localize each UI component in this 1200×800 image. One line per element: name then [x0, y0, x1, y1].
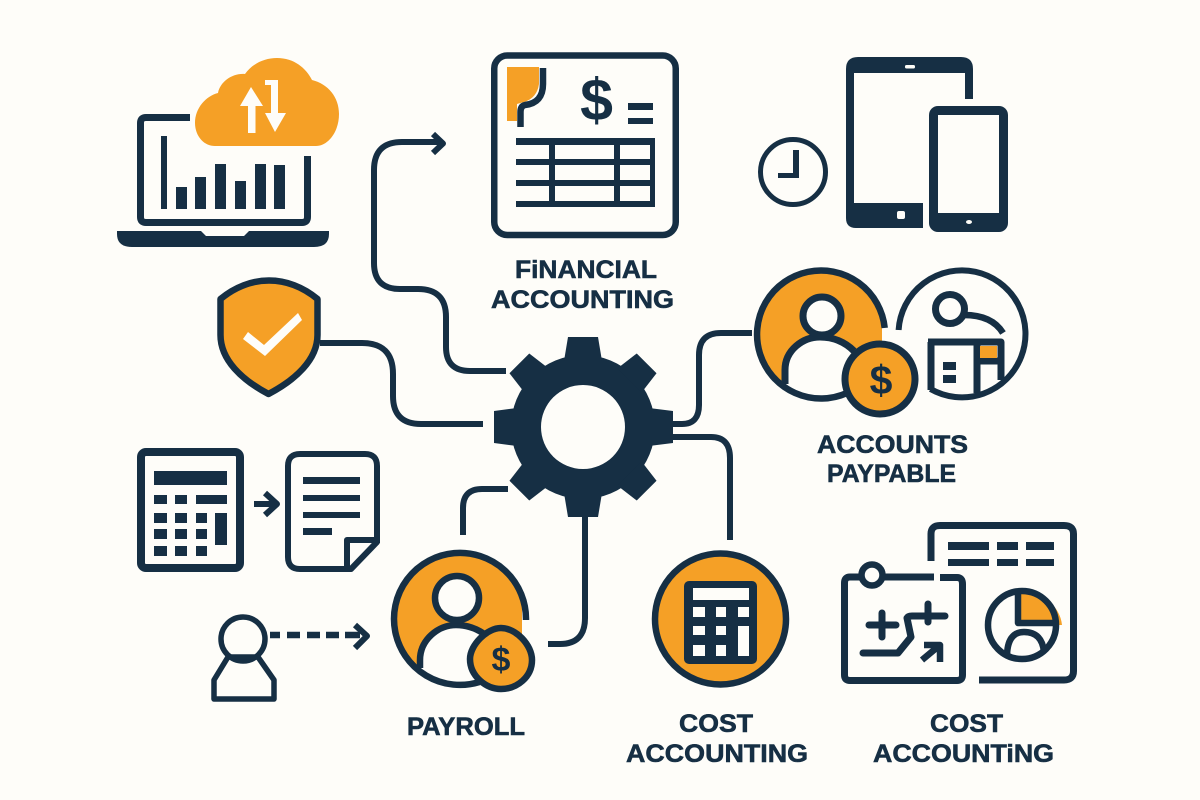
icon: laptop with cloud and bar chart: [117, 58, 339, 247]
label: accounts payable: PAYPABLE: [827, 460, 956, 488]
label: financial accounting: [491, 256, 674, 314]
tablet: [846, 57, 973, 228]
circle outline: [757, 271, 885, 399]
clipboard: [844, 577, 962, 680]
icon: financial accounting statement: [494, 56, 676, 235]
dollar sign: $: [580, 67, 613, 133]
person body fill: [785, 337, 860, 402]
ledger table: [516, 138, 655, 207]
ledger: [928, 342, 1001, 393]
label: accounts payable: [817, 431, 968, 488]
icon: accounts payable person with coin: [757, 270, 915, 414]
connector: gear to payroll top: [463, 489, 508, 535]
person with tail: [936, 294, 964, 324]
icon: payroll person with coin: [394, 553, 532, 689]
icon: person outline: [214, 617, 274, 699]
connector: shield to gear: [320, 343, 483, 424]
person body fill: [420, 625, 492, 688]
clipboard ring: [862, 564, 882, 586]
coin dollar: $: [870, 357, 893, 403]
icon: accounts payable person and ledger: [899, 270, 1025, 397]
report lines: [948, 542, 1054, 566]
central gear: [494, 337, 673, 517]
clock: [760, 140, 826, 204]
equals bars: [628, 103, 653, 124]
icon: tablet, phone and clock: [760, 57, 1008, 232]
coin: [470, 628, 532, 689]
circle outline: [394, 553, 526, 685]
circle outline: [899, 270, 1025, 397]
connector: gear to payroll bottom: [548, 515, 585, 644]
coin: [845, 344, 915, 414]
person head: [435, 576, 479, 620]
phone: [929, 106, 1008, 232]
icon: document: [288, 454, 380, 572]
label: cost accounting right: ACCOUNTiNG: [873, 740, 1054, 768]
report page: [931, 526, 1074, 680]
statement frame: [494, 56, 676, 235]
connector: gear to financial accounting: [374, 134, 506, 371]
label: cost accounting: [626, 710, 808, 768]
icon: calculator: [141, 452, 240, 568]
bar chart: [161, 136, 285, 209]
connector: gear to accounts payable: [673, 333, 752, 424]
arrow: calculator to document: [254, 493, 277, 515]
arrow: dashed person to payroll: [270, 625, 367, 648]
label: cost accounting right: [873, 710, 1054, 768]
orange tab: [507, 67, 539, 121]
cloud: [195, 58, 339, 146]
laptop screen frame: [140, 118, 308, 222]
icon: shield with checkmark: [220, 280, 318, 394]
icon: cost report with clipboard and pie chart: [844, 526, 1074, 680]
upload and download arrows: [240, 80, 286, 133]
trend arrow: [922, 645, 940, 662]
icon: cost accounting calculator circle: [655, 554, 786, 684]
label: payroll: PAYROLL: [407, 713, 525, 741]
orange disc: [397, 556, 522, 664]
label: financial accounting: FiNANCIAL: [515, 256, 657, 284]
label: cost accounting: ACCOUNTING: [626, 740, 808, 768]
laptop base: [117, 231, 329, 247]
person body outline: [785, 337, 854, 384]
label: financial accounting: ACCOUNTING: [491, 286, 674, 314]
coin dollar: $: [492, 641, 511, 679]
plus signs and trend line: [863, 604, 945, 653]
pie chart: [988, 591, 1062, 659]
tab hook: [520, 68, 543, 127]
person head: [803, 297, 841, 335]
orange disc: [760, 274, 882, 380]
label: cost accounting right: COST: [930, 710, 1003, 738]
connector: gear to cost accounting: [673, 437, 730, 540]
person body outline: [420, 625, 487, 668]
label: accounts payable: ACCOUNTS: [817, 431, 968, 459]
label: cost accounting: COST: [679, 710, 753, 738]
